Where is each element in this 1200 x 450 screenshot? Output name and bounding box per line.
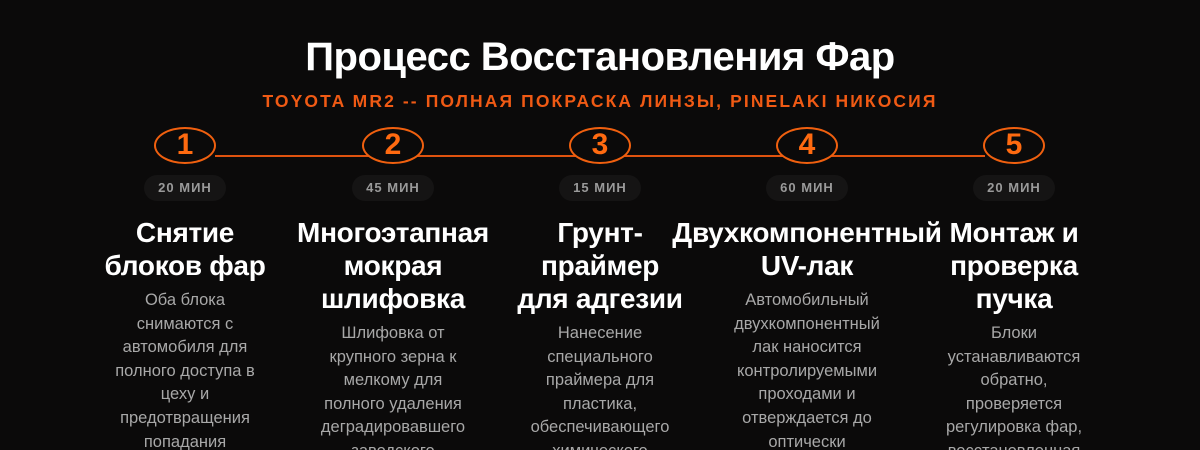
step 2 number: 2 <box>385 128 401 161</box>
title: Процесс Восстановления Фар <box>305 35 895 79</box>
step 2 description: полного удаления <box>324 395 462 413</box>
step 5 number: 5 <box>1006 128 1022 161</box>
step 1 heading: блоков фар <box>104 250 266 281</box>
step 1 description: Оба блока <box>145 291 225 309</box>
step 3 heading: праймер <box>541 250 659 281</box>
step 5 description <box>946 324 1082 450</box>
step 5 description: проверяется <box>966 395 1062 413</box>
step 2 heading <box>297 217 489 314</box>
step 2 heading: мокрая <box>344 250 442 281</box>
step 1 description <box>115 291 255 450</box>
step 1 duration: 20 МИН <box>158 180 212 195</box>
step 3 description: обеспечивающего <box>531 418 669 436</box>
step 4 <box>672 127 942 450</box>
step 4 description: лак наносится <box>752 338 862 356</box>
step 4 duration: 60 МИН <box>780 180 834 195</box>
step 1 heading <box>104 217 266 281</box>
step 4 description: отверждается до <box>742 409 872 427</box>
step 3 duration <box>559 175 641 201</box>
step 4 description: контролируемыми <box>737 362 877 380</box>
step 2 description: Шлифовка от <box>341 324 445 342</box>
step 5 <box>946 127 1082 450</box>
step 3 description: праймера для <box>546 371 654 389</box>
step 5 duration: 20 МИН <box>987 180 1041 195</box>
step 3 <box>517 127 683 450</box>
step 5 heading: пучка <box>976 283 1052 314</box>
step 4 description: Автомобильный <box>745 291 869 309</box>
step 2 heading: Многоэтапная <box>297 217 489 248</box>
step 4 description <box>734 291 880 450</box>
step 1 number <box>154 127 216 164</box>
step 3 description: Нанесение <box>558 324 642 342</box>
step 3 heading: Грунт- <box>557 217 643 248</box>
step 2 description: крупного зерна к <box>330 348 456 366</box>
step 2 description: деградировавшего <box>321 418 465 436</box>
step 5 number <box>983 127 1045 164</box>
step 2 duration: 45 МИН <box>366 180 420 195</box>
step 5 heading <box>949 217 1079 314</box>
step 1 heading: Снятие <box>136 217 234 248</box>
step 4 description: проходами и <box>758 385 856 403</box>
step 1 description: автомобиля для <box>123 338 247 356</box>
step 3 number: 3 <box>592 128 608 161</box>
step 1 description: снимаются с <box>137 315 233 333</box>
step 2 description <box>321 324 465 450</box>
step 2 description: мелкому для <box>344 371 442 389</box>
step 3 heading: для адгезии <box>517 283 683 314</box>
step 4 heading: UV-лак <box>761 250 853 281</box>
step 1 description: полного доступа в <box>115 362 255 380</box>
step 3 number <box>569 127 631 164</box>
step 4 heading <box>672 217 942 281</box>
step 4 number: 4 <box>799 128 815 161</box>
timeline connector line <box>215 155 985 157</box>
step 5 description: регулировка фар, <box>946 418 1082 436</box>
step 4 duration <box>766 175 848 201</box>
step 4 description: двухкомпонентный <box>734 315 880 333</box>
step 2 <box>297 127 489 450</box>
step 2 heading: шлифовка <box>321 283 465 314</box>
step 5 heading: проверка <box>950 250 1078 281</box>
step 5 duration <box>973 175 1055 201</box>
step 3 duration: 15 МИН <box>573 180 627 195</box>
subtitle: TOYOTA MR2 -- ПОЛНАЯ ПОКРАСКА ЛИНЗЫ, PINELAKI НИКОСИЯ <box>262 91 938 111</box>
step 3 description: пластика, <box>563 395 637 413</box>
step 1 <box>104 127 266 450</box>
step 1 number: 1 <box>177 128 193 161</box>
step 4 number <box>776 127 838 164</box>
step 1 description: цеху и <box>161 385 209 403</box>
step 3 description <box>531 324 669 450</box>
step 1 description: предотвращения <box>120 409 250 427</box>
step 5 description: Блоки <box>991 324 1037 342</box>
step 3 description: специального <box>547 348 653 366</box>
step 2 number <box>362 127 424 164</box>
step 3 heading <box>517 217 683 314</box>
step 5 description: обратно, <box>980 371 1048 389</box>
step 4 heading: Двухкомпонентный <box>672 217 942 248</box>
step 5 description: устанавливаются <box>948 348 1080 366</box>
step 2 duration <box>352 175 434 201</box>
step 5 heading: Монтаж и <box>949 217 1079 248</box>
step 1 duration <box>144 175 226 201</box>
